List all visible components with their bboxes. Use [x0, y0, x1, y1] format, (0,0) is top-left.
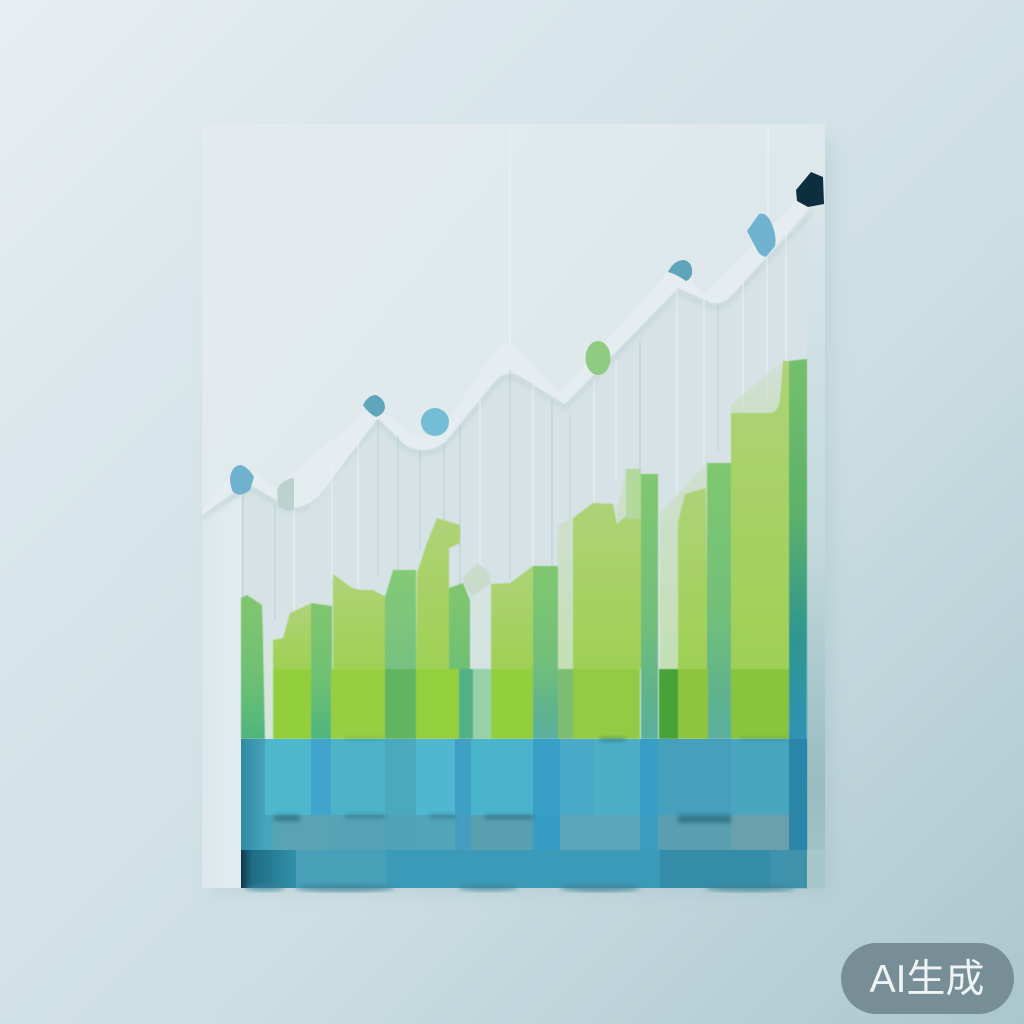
panel: lower paper	[202, 196, 825, 888]
marker 7	[747, 214, 776, 257]
bright green blocks	[273, 669, 789, 739]
pale column under bump	[472, 590, 491, 669]
pale backing column	[263, 640, 273, 739]
marker 2	[277, 478, 294, 510]
vertical hairlines	[243, 124, 786, 620]
marker 1	[230, 465, 254, 495]
left strip	[202, 495, 241, 888]
marker 4	[421, 408, 449, 436]
badge: AI generated: AI生成	[870, 958, 984, 1001]
marker 3	[363, 395, 385, 417]
marker 6	[668, 260, 692, 281]
band shadows	[274, 738, 789, 823]
badge: AI generated	[841, 943, 1014, 1014]
band: bottom strip	[241, 850, 825, 888]
small mint bump	[463, 563, 491, 597]
chart panel	[202, 124, 825, 888]
medium green bars	[241, 463, 731, 739]
shadow under line	[202, 212, 812, 518]
tall right bar	[789, 359, 807, 888]
translucent bar cap	[626, 469, 641, 519]
bottom shadows	[245, 884, 795, 892]
blue bands	[241, 738, 825, 888]
marker 5	[586, 341, 610, 375]
panel shadow	[212, 140, 832, 892]
band: top row	[241, 739, 807, 850]
right strip	[807, 196, 825, 888]
line ribbon	[202, 200, 812, 515]
panel: paper sheet	[202, 124, 825, 888]
bar chart: green bars	[241, 359, 807, 888]
marker dots	[230, 172, 824, 510]
light green bars	[273, 361, 789, 669]
band: muted row	[265, 815, 789, 850]
marker 8	[796, 172, 824, 207]
pale bars	[558, 361, 783, 669]
